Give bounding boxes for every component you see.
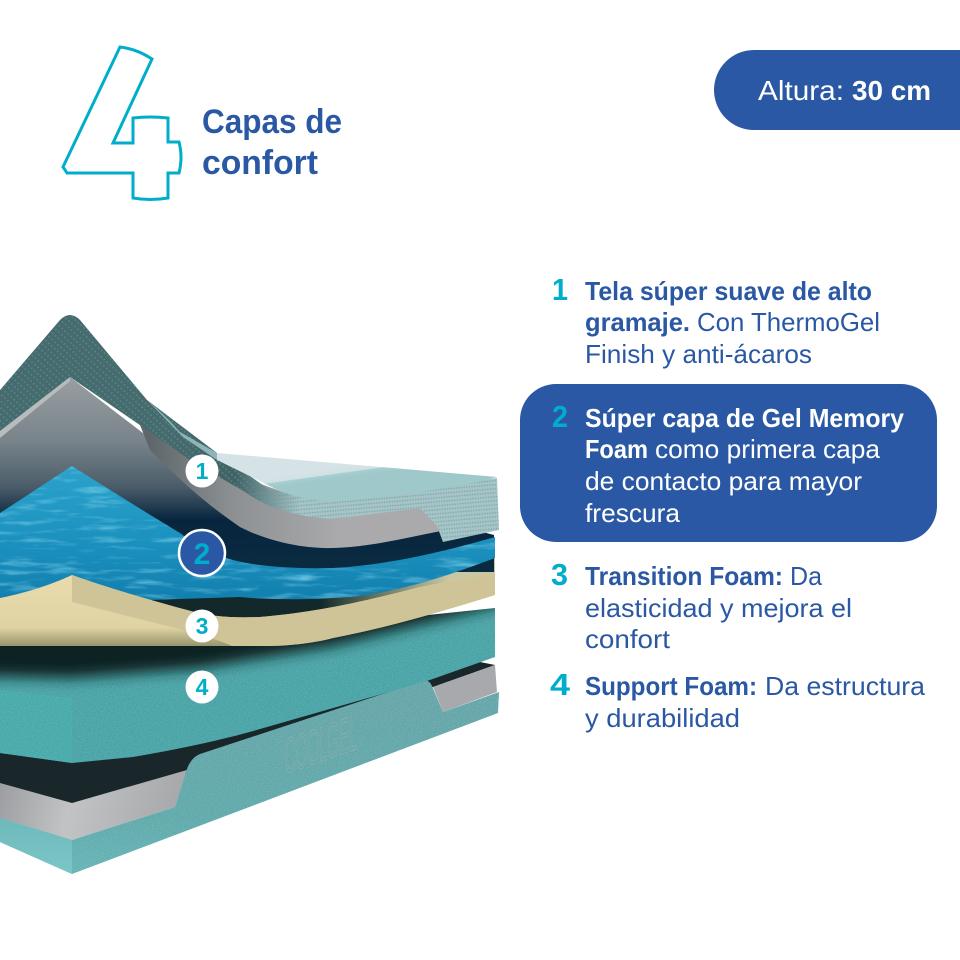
fabric edge strip bbox=[147, 400, 217, 460]
panel: item 2 highlighted description: de contacto para mayor bbox=[585, 466, 862, 496]
item 4 description: y durabilidad bbox=[585, 703, 740, 733]
badge 1: 1 bbox=[196, 458, 209, 484]
transition foam front face bbox=[72, 573, 495, 646]
item 4 description bbox=[550, 667, 926, 733]
badge 2 highlighted bbox=[179, 530, 225, 576]
badge 3 bbox=[186, 610, 218, 642]
panel: item 2 highlighted description: como primera capa bbox=[655, 434, 881, 464]
item 3 description: elasticidad y mejora el bbox=[585, 593, 852, 623]
layer 1 fabric body bbox=[0, 315, 499, 542]
grey base border right bbox=[433, 665, 497, 712]
item 4 description: 4 bbox=[550, 667, 571, 702]
item 1 description: Finish y anti-ácaros bbox=[585, 339, 812, 369]
item 3 description bbox=[551, 557, 852, 654]
item 4 description: Support Foam: bbox=[585, 671, 757, 701]
fabric side band stripes bbox=[245, 478, 499, 542]
panel: item 2 highlighted description: 2 bbox=[552, 399, 568, 434]
panel: item 2 highlighted description: Foam bbox=[585, 434, 648, 464]
base teal cover bbox=[0, 681, 499, 874]
height pill: Altura 30 cm: Altura: bbox=[758, 75, 844, 106]
item 1 description: 1 bbox=[552, 272, 568, 307]
dark gap under support foam bbox=[0, 662, 495, 805]
item 3 description: 3 bbox=[551, 557, 568, 592]
light strip along grey peak bbox=[0, 377, 70, 438]
layer 3 transition foam bbox=[0, 573, 495, 646]
item 4 description: Da estructura bbox=[765, 671, 926, 701]
support foam left face bbox=[0, 690, 72, 763]
item 1 description: Tela súper suave de alto bbox=[585, 276, 872, 306]
badge 1 bbox=[186, 454, 218, 488]
badge 4 bbox=[186, 670, 218, 704]
panel: item 2 highlighted description bbox=[520, 384, 937, 542]
mattress layers illustration: COOLGEL bbox=[285, 703, 357, 785]
badge 3: 3 bbox=[196, 613, 208, 639]
layer 1 underside: grey inner face bbox=[0, 377, 494, 572]
shadow wedge behind transition foam bbox=[110, 555, 495, 625]
layer 2 gel memory foam bbox=[0, 466, 495, 605]
item 3 description: confort bbox=[585, 624, 671, 654]
mattress layers illustration bbox=[0, 315, 520, 874]
number 4 outline icon bbox=[63, 47, 181, 200]
item 3 description: Transition Foam: bbox=[585, 561, 783, 591]
item 1 description: Con ThermoGel bbox=[697, 307, 880, 337]
height pill: Altura 30 cm bbox=[714, 50, 960, 130]
fabric dot texture left bbox=[0, 315, 270, 492]
support foam top shadow bbox=[0, 608, 495, 689]
layer 4 support foam bbox=[0, 608, 495, 763]
heading: Capas de confort: Capas de bbox=[202, 103, 342, 141]
item 1 description: gramaje. bbox=[585, 307, 690, 337]
base teal left corner bbox=[0, 818, 72, 874]
item 3 description: Da bbox=[790, 561, 823, 591]
heading: Capas de confort bbox=[202, 103, 342, 182]
height pill: Altura 30 cm: 30 cm bbox=[852, 75, 931, 106]
heading: Capas de confort: confort bbox=[202, 144, 318, 182]
layer 1 fabric top surface bbox=[217, 453, 497, 502]
badge 4: 4 bbox=[196, 674, 209, 700]
grey base border left bbox=[0, 770, 187, 840]
badge 2 highlighted: 2 bbox=[194, 538, 210, 571]
panel: item 2 highlighted description: frescura bbox=[585, 498, 681, 528]
item 1 description bbox=[552, 272, 880, 369]
panel: item 2 highlighted description: Súper capa de Gel Memory bbox=[585, 403, 905, 433]
layer 1 grey comfort band bbox=[140, 425, 441, 548]
